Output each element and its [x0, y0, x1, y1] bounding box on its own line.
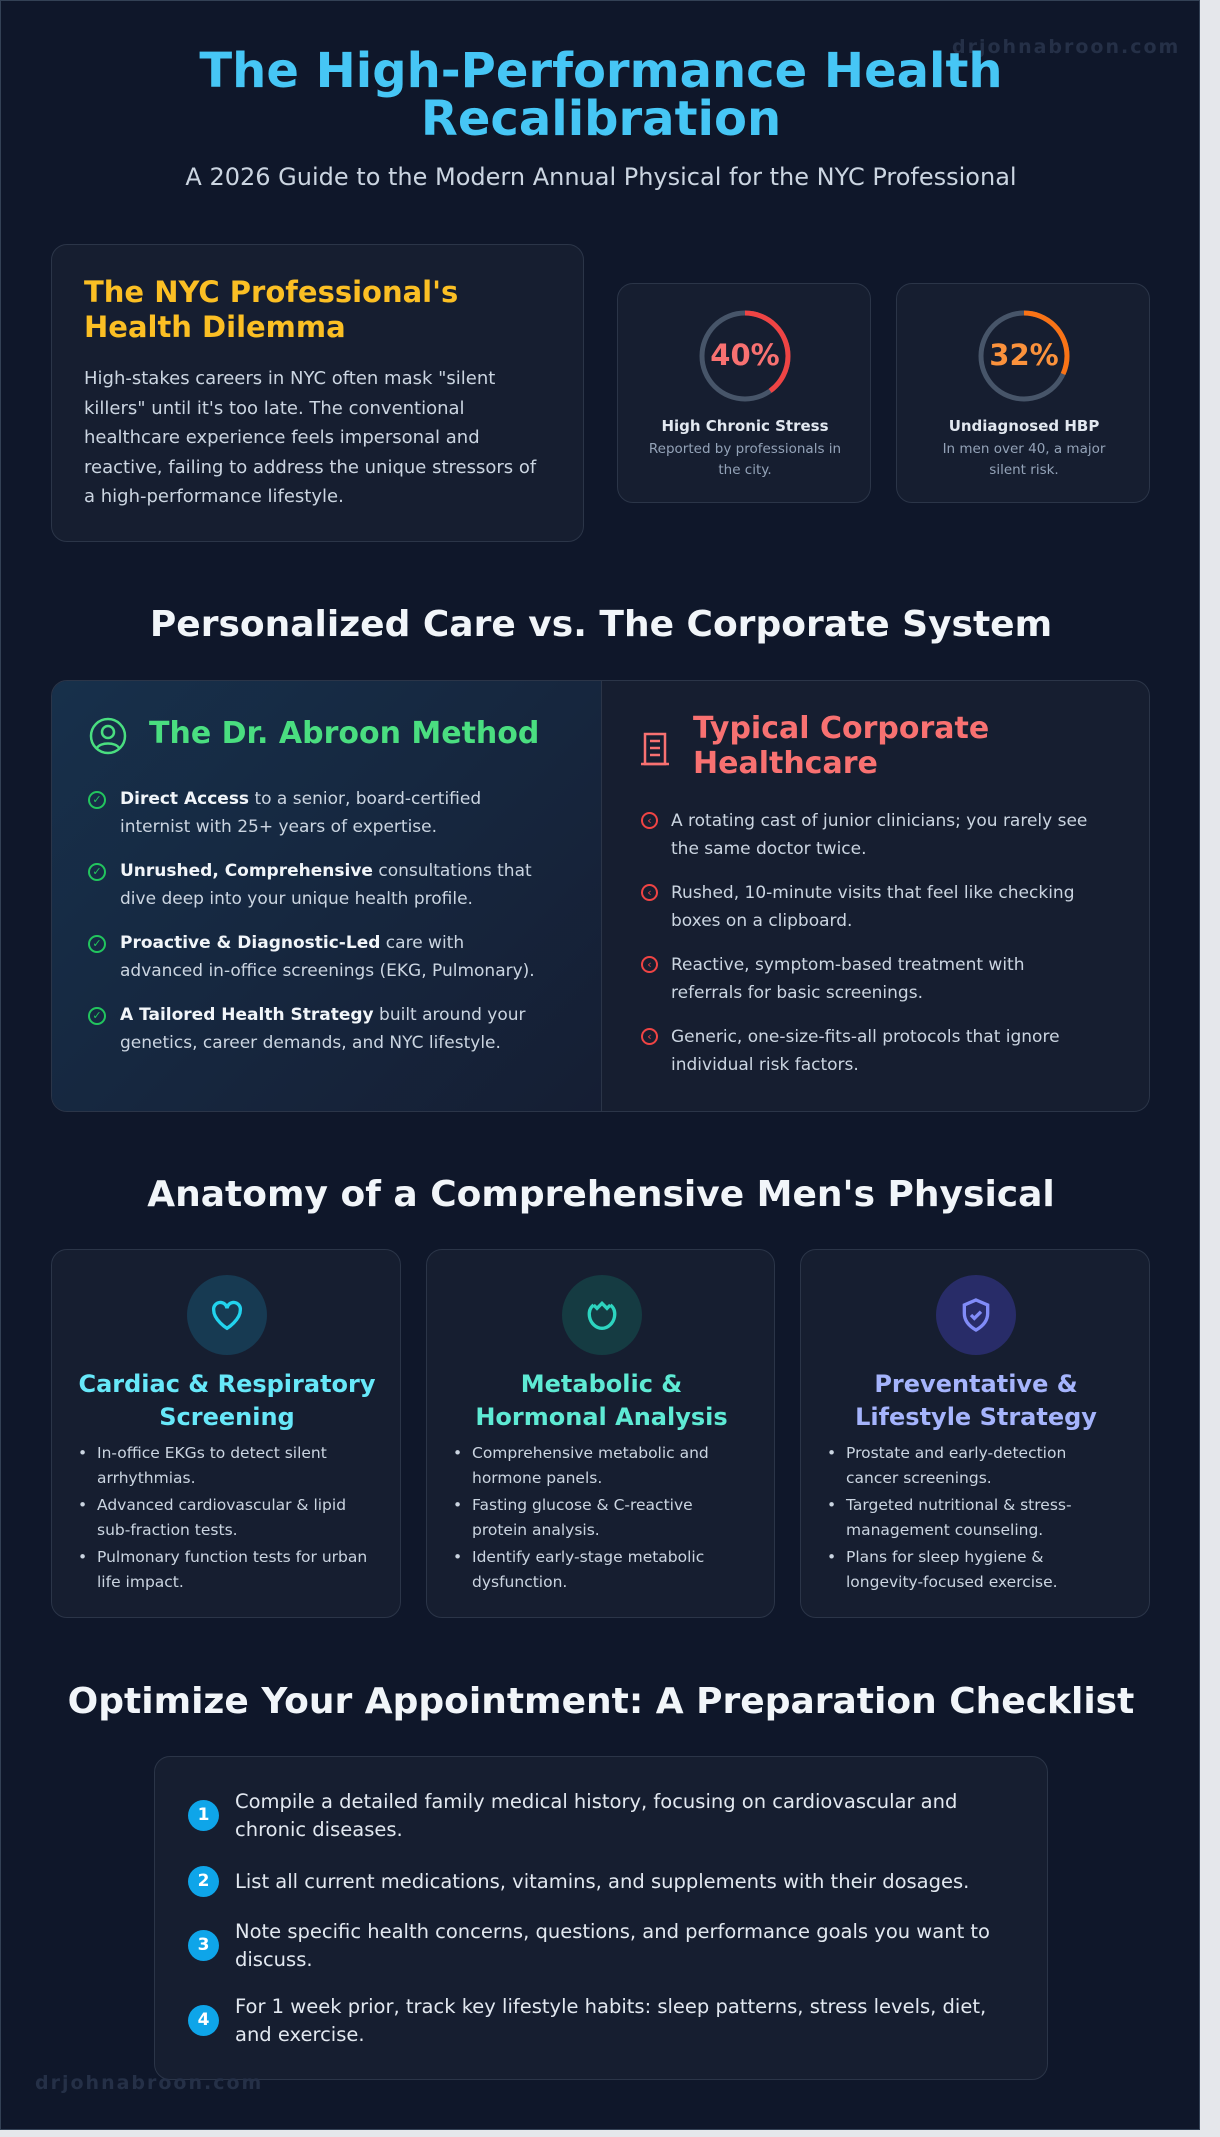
heading: Typical Corporate: [693, 711, 989, 746]
title: Screening: [159, 1403, 295, 1431]
bullets: Plans for sleep hygiene & longevity-focused exercise.: [846, 1548, 1058, 1590]
bullets: Comprehensive metabolic and hormone panels.: [472, 1444, 709, 1486]
icon: shield: [936, 1275, 1016, 1355]
ring 32%: [978, 310, 1070, 402]
items: ‹: [647, 958, 652, 971]
right column: corporate: [641, 711, 1087, 1075]
panel: checklist: Note specific health concerns, questions, and performance goals you want to discuss.: [235, 1920, 990, 1971]
items: ‹: [647, 814, 652, 827]
stat label: Undiagnosed HBP: [949, 417, 1099, 435]
items: A Tailored Health Strategy built around your genetics, career demands, and NYC lifestyle.: [120, 1005, 526, 1053]
items: [641, 811, 1087, 1075]
bullets: [455, 1444, 709, 1590]
panel: checklist: [154, 1756, 1048, 2080]
dilemma heading: [84, 275, 458, 344]
left column: Abroon method: [52, 681, 602, 1113]
items: Unrushed, Comprehensive consultations that dive deep into your unique health profile.: [120, 861, 532, 909]
title: [199, 43, 1003, 147]
bullets: Pulmonary function tests for urban life impact.: [97, 1548, 367, 1590]
items: Reactive, symptom-based treatment with referrals for basic screenings.: [671, 955, 1024, 1003]
heading: The Dr. Abroon Method: [149, 716, 539, 751]
bullets: In-office EKGs to detect silent arrhythmias.: [97, 1444, 327, 1486]
title: Cardiac & Respiratory: [78, 1370, 376, 1398]
items: ✓: [92, 1009, 102, 1022]
panel: checklist: 2: [198, 1871, 209, 1891]
ring 32%: 32%: [989, 338, 1059, 372]
stat label: High Chronic Stress: [661, 417, 829, 435]
items: Proactive & Diagnostic-Led care with: [120, 933, 464, 953]
heading: checklist: Optimize Your Appointment: A Preparation Checklist: [68, 1681, 1134, 1722]
items: Direct Access to a senior, board-certified internist with 25+ years of expertise.: [120, 789, 481, 837]
panel: checklist: List all current medications, vitamins, and supplements with their dosages.: [235, 1870, 969, 1893]
title: Lifestyle Strategy: [855, 1403, 1097, 1431]
stat desc: In men over 40, a major silent risk.: [943, 441, 1105, 478]
title: The High-Performance Health: [199, 43, 1003, 99]
bullets: sub-fraction tests.: [97, 1520, 238, 1538]
items: [88, 789, 535, 1053]
panel: comparison: [51, 680, 1150, 1112]
icon: building: [641, 732, 669, 766]
bullets: [80, 1444, 367, 1590]
items: ✓: [92, 865, 102, 878]
dilemma heading: Health Dilemma: [84, 310, 346, 344]
title: [855, 1370, 1097, 1431]
card: preventative: [800, 1249, 1150, 1618]
title: Recalibration: [421, 91, 781, 147]
panel: checklist: For 1 week prior, track key lifestyle habits: sleep patterns, stress levels, diet, and exercise.: [235, 1995, 986, 2046]
bullets: Targeted nutritional & stress-management counseling.: [846, 1496, 1072, 1538]
items: ✓: [92, 937, 102, 950]
stat card: stress: [617, 283, 871, 503]
title: Preventative &: [874, 1370, 1078, 1398]
items: advanced in-office screenings (EKG, Pulmonary).: [120, 961, 535, 981]
ring 40%: 40%: [710, 338, 780, 372]
title: Hormonal Analysis: [475, 1403, 728, 1431]
items: Generic, one-size-fits-all protocols that ignore individual risk factors.: [671, 1027, 1060, 1075]
stat card: HBP: [896, 283, 1150, 503]
heading: [693, 711, 989, 781]
icon: heart: [187, 1275, 267, 1355]
title: [475, 1370, 728, 1431]
items: A rotating cast of junior clinicians; you rarely see the same doctor twice.: [671, 811, 1087, 859]
bullets: [829, 1444, 1072, 1590]
card: cardiac: [51, 1249, 401, 1618]
title: Metabolic &: [521, 1370, 682, 1398]
panel: checklist: 1: [198, 1805, 209, 1825]
dilemma heading: The NYC Professional's: [84, 275, 458, 309]
bullets: Identify early-stage metabolic dysfunction.: [472, 1548, 704, 1590]
items: ‹: [647, 1030, 652, 1043]
heading: anatomy: Anatomy of a Comprehensive Men's Physical: [147, 1174, 1055, 1215]
card: metabolic: [426, 1249, 775, 1618]
panel: checklist: Compile a detailed family medical history, focusing on cardiovascular and chronic diseases.: [235, 1790, 957, 1841]
bullets: Advanced cardiovascular & lipid: [97, 1496, 346, 1514]
subtitle: A 2026 Guide to the Modern Annual Physical for the NYC Professional: [185, 163, 1017, 191]
icon: user: [90, 718, 126, 754]
icon: apple: [562, 1275, 642, 1355]
bullets: Prostate and early-detection cancer screenings.: [846, 1444, 1066, 1486]
ring 40%: [700, 310, 790, 402]
items: ✓: [92, 793, 102, 806]
title: [78, 1370, 376, 1431]
panel: checklist: 3: [198, 1935, 209, 1955]
panel: dilemma: [51, 244, 584, 542]
dilemma text: High-stakes careers in NYC often mask "silent killers" until it's too late. The conventional healthcare experience feels impersonal and reactive, failing to address the unique stressors of a high-performance lifestyle.: [84, 368, 536, 507]
heading: Healthcare: [693, 746, 878, 781]
stat desc: Reported by professionals in the city.: [649, 441, 841, 478]
watermark top: drjohnabroon.com: [952, 36, 1180, 58]
panel: checklist: 4: [198, 2010, 209, 2030]
watermark bottom: drjohnabroon.com: [35, 2072, 263, 2094]
items: Rushed, 10-minute visits that feel like checking boxes on a clipboard.: [671, 883, 1074, 931]
items: ‹: [647, 886, 652, 899]
bullets: Fasting glucose & C-reactive protein analysis.: [472, 1496, 693, 1538]
heading: comparison: Personalized Care vs. The Corporate System: [150, 604, 1052, 645]
